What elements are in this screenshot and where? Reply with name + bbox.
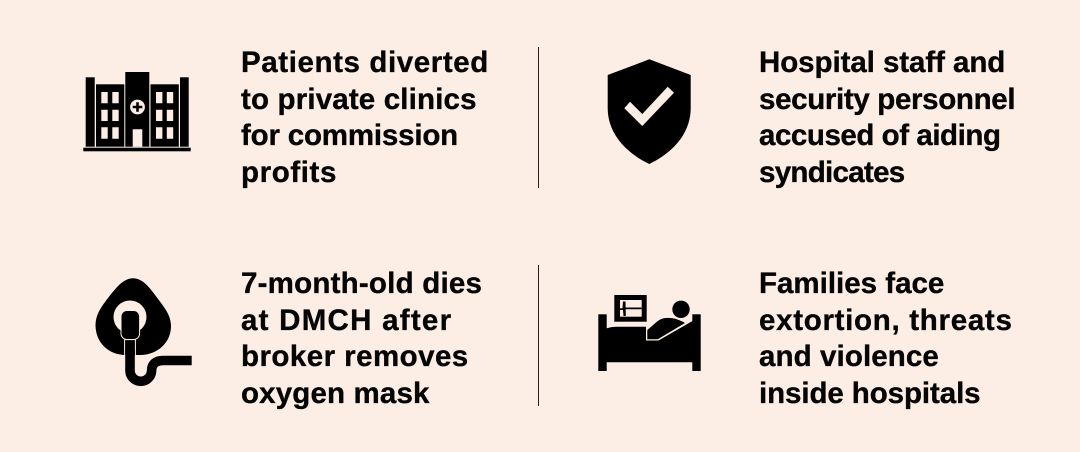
- text: 7-month-old dies: at DMCH after: [241, 304, 452, 336]
- text: families face extortion: [759, 267, 1013, 410]
- icon: shield with check: [608, 59, 691, 164]
- text: 7-month-old dies: 7-month-old dies: [241, 267, 482, 300]
- text: 7-month-old dies: oxygen mask: [241, 376, 430, 410]
- icon: hospital building: [83, 72, 191, 151]
- text: hospital staff: security personnel: [759, 82, 1015, 116]
- icon: oxygen mask: [96, 278, 192, 381]
- text: 7-month-old dies: broker removes: [241, 340, 469, 373]
- text: hospital staff: syndicates: [759, 156, 904, 188]
- text: patients diverted: for commission: [241, 119, 458, 152]
- text: families face extortion: inside hospitals: [759, 376, 980, 410]
- text: families face extortion: Families face: [759, 267, 944, 300]
- text: families face extortion: extortion, threats: [759, 304, 1013, 336]
- text: patients diverted: to private clinics: [241, 82, 477, 116]
- text: patients diverted: profits: [241, 156, 337, 188]
- text: patients diverted: Patients diverted: [241, 46, 489, 79]
- text: hospital staff: accused of aiding: [759, 119, 1001, 152]
- text: hospital staff: Hospital staff and: [759, 46, 1005, 79]
- text: families face extortion: and violence: [759, 340, 939, 373]
- text: 7-month-old dies: [241, 267, 482, 410]
- icon: patient in hospital bed: [598, 295, 701, 371]
- text: patients diverted: [241, 46, 489, 188]
- text: hospital staff: [759, 46, 1015, 188]
